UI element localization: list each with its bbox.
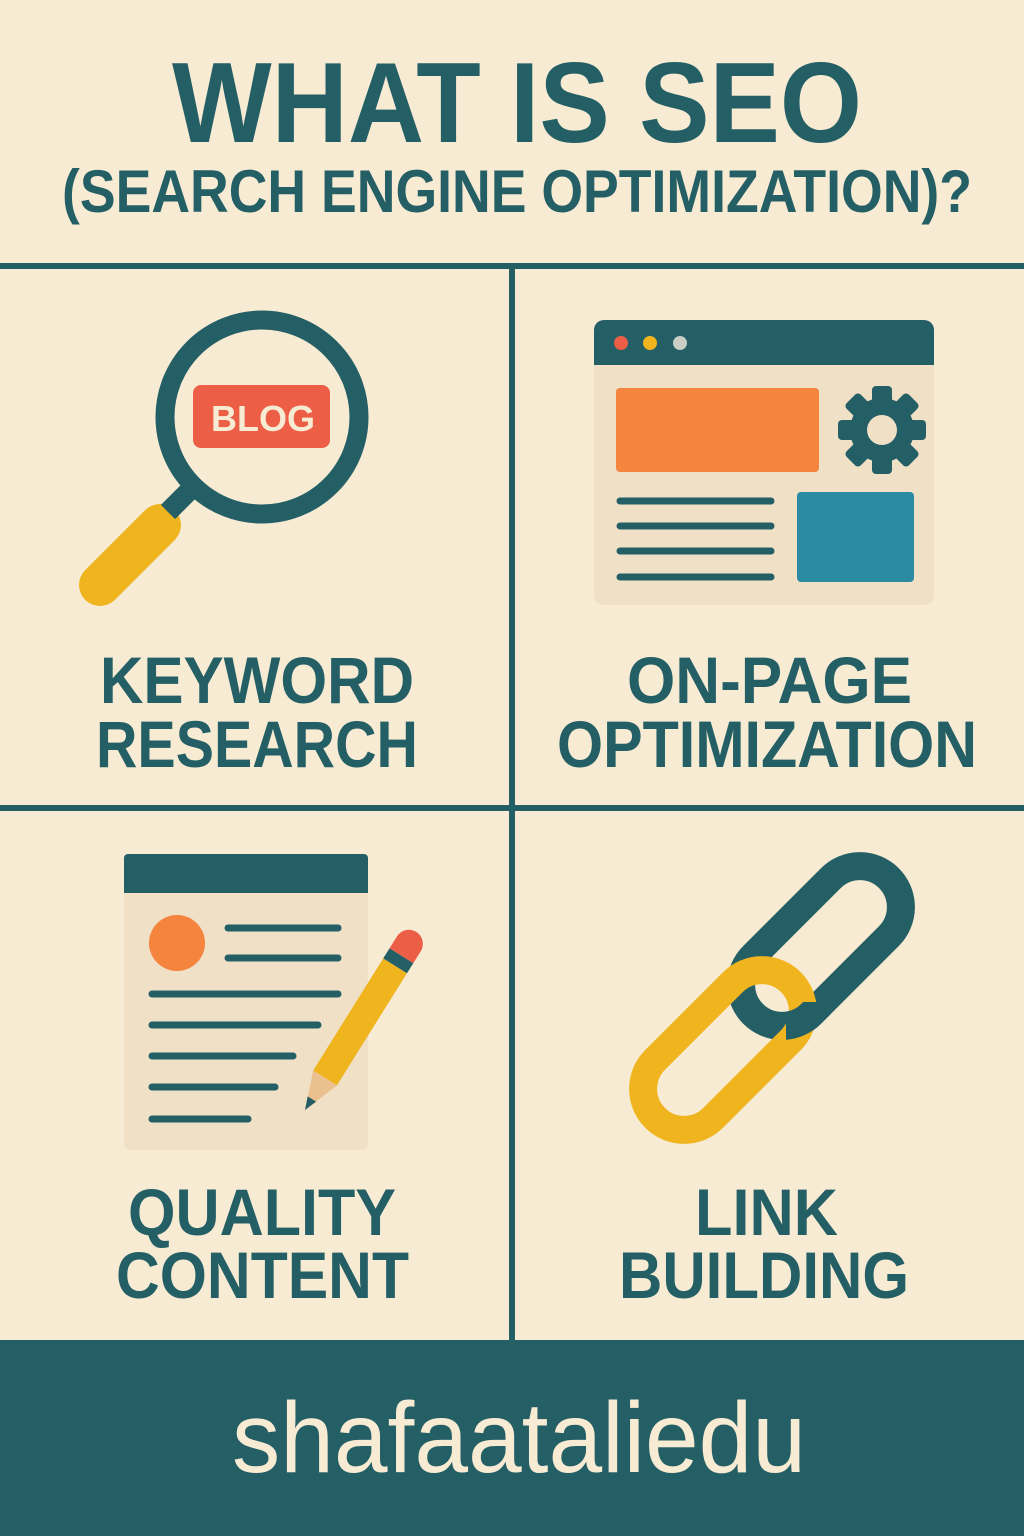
label: quality content: QUALITY bbox=[128, 1175, 396, 1249]
label: on-page optimization: ON-PAGE bbox=[627, 643, 912, 717]
title bbox=[62, 40, 972, 225]
footer bbox=[0, 1340, 1024, 1536]
panel: link building bbox=[619, 849, 918, 1312]
icon: magnifying glass: BLOG bbox=[211, 398, 315, 439]
label: quality content: CONTENT bbox=[116, 1238, 409, 1312]
icon: browser window bbox=[594, 320, 934, 605]
label: on-page optimization bbox=[557, 643, 977, 781]
label: quality content bbox=[116, 1175, 409, 1312]
title: WHAT IS SEO bbox=[172, 40, 862, 167]
icon: magnifying glass bbox=[100, 320, 359, 585]
label: link building: LINK bbox=[695, 1175, 838, 1249]
label: keyword research: KEYWORD bbox=[100, 643, 414, 717]
icon: document with pencil bbox=[124, 854, 428, 1150]
icon: chain links bbox=[626, 849, 918, 1147]
footer: shafaataliedu bbox=[232, 1382, 806, 1494]
panel: quality content bbox=[116, 854, 428, 1312]
label: link building: BUILDING bbox=[619, 1238, 909, 1312]
label: on-page optimization: OPTIMIZATION bbox=[557, 707, 977, 781]
label: link building bbox=[619, 1175, 909, 1312]
label: keyword research: RESEARCH bbox=[96, 707, 418, 781]
panel: keyword research bbox=[96, 320, 418, 781]
panel: on-page optimization bbox=[557, 320, 977, 781]
label: keyword research bbox=[96, 643, 418, 781]
